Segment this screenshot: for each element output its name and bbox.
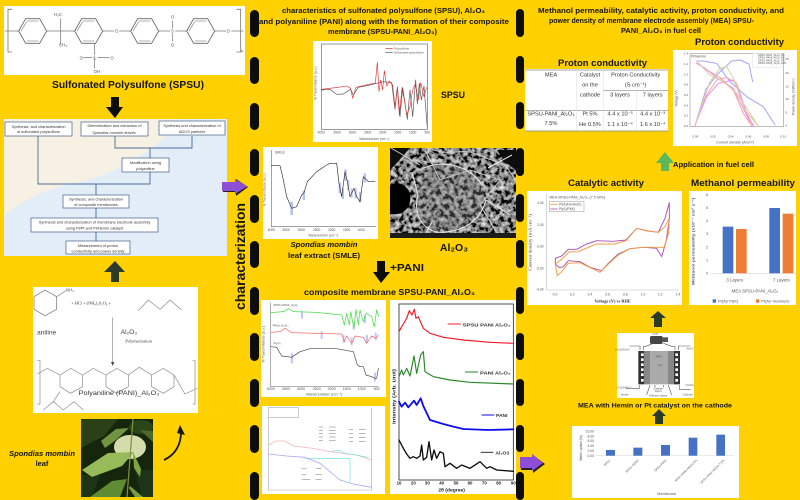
label: Application in fuel cell: Application in fuel cell: [673, 162, 754, 169]
panel: research flowchart: [4, 119, 227, 256]
photo: Spondias mombin leaf: [81, 419, 153, 497]
chart: polarization and power density: 10: [785, 97, 789, 101]
chart: XRD patterns: Intensity (Arb. Unit): [392, 369, 398, 424]
panel: SPSU chemical structure: O: [171, 43, 175, 48]
diagram: MEA fuel cell: [615, 332, 694, 398]
panel: PANI synthesis reaction: Al₂O₃: [121, 329, 137, 336]
chart: XRD patterns: 10: [397, 481, 402, 486]
panel: PANI synthesis reaction: NH₂: [66, 287, 74, 292]
heading: Proton conductivity table: Proton conductivity: [558, 58, 648, 69]
label: +PANI: +PANI: [390, 262, 424, 274]
heading: characteristics of materials: and polyaniline (PANI) along with the formation of their composite: [259, 17, 509, 26]
chart: polarization and power density: 25: [785, 57, 789, 61]
chart: polarization and power density: 1.0: [684, 72, 688, 76]
chart: cyclic voltammogram: -2,00: [536, 266, 544, 270]
chart: polarization and power density: 0.0: [684, 124, 688, 128]
table: proton conductivity: 1.6 x 10⁻⁴: [640, 121, 666, 128]
label: characterization: characterization: [232, 203, 248, 310]
table: proton conductivity: on the: [582, 82, 598, 88]
chart: water uptake bars: SPSU-PANI-Al2O3 7.5%: [699, 458, 726, 485]
chart: methanol permeability bars: Pt(A)/ Hemin(K): [761, 299, 790, 304]
chart: polarization and power density: Current density (A/cm²): [716, 141, 754, 145]
chart: methanol permeability bars: 0: [706, 272, 708, 276]
heading: characteristics of materials: membrane (SPSU-PANI_Al₂O₃): [328, 27, 437, 36]
heading: Methanol permeability: Methanol permeability: [691, 178, 796, 189]
arrow: curved up from leaf: [164, 425, 185, 460]
chart: XRD patterns: 80: [496, 481, 502, 486]
panel: research flowchart: using Pt/Pt and Pt/Hemin catalyst: [66, 226, 124, 230]
panel: SPSU chemical structure: O: [110, 55, 114, 60]
diagram: MEA fuel cell: Load: [652, 332, 658, 336]
label: MEA catalyst caption: MEA with Hemin or Pt catalyst on the cathode: [578, 402, 732, 410]
chart: polarization and power density: 0.00: [692, 134, 699, 138]
panel: SPSU chemical structure: O: [115, 29, 119, 34]
chart: polarization and power density: 0.10: [780, 134, 787, 138]
table: proton conductivity: 4.4 x 10⁻³: [640, 111, 665, 117]
chart: water uptake bars: Water uptake (%): [579, 435, 583, 461]
chart: polarization and power density: [673, 50, 797, 146]
label: SMLE: Spondias mombin: [290, 240, 358, 249]
chart: water uptake bars: 2.00: [588, 449, 594, 453]
chart: TGA thermogram: [262, 406, 385, 494]
chart: polarization and power density: 5: [785, 110, 787, 114]
panel: research flowchart: Spondias mombin leaves.: [92, 130, 137, 135]
panel: research flowchart: Synthesis and characterization of: [163, 123, 222, 128]
chart: polarization and power density: 0.04: [728, 134, 734, 138]
diagram: MEA fuel cell: CH₃OH/H₂O: [615, 347, 630, 351]
table: proton conductivity: 7.5%: [545, 121, 557, 127]
panel: SPSU chemical structure: O: [171, 14, 175, 19]
panel: SPSU chemical structure: S: [171, 29, 174, 34]
chart: composite FTIR spectra: Wavenumber (cm⁻¹): [306, 391, 343, 396]
arrow: up from PANI reaction: [104, 261, 125, 282]
label: SMLE: [288, 240, 361, 260]
heading: characteristics of materials: characteristics of sulfonated polysulfone (SPSU), Al₂O₃: [282, 6, 486, 15]
chart: SPSU FTIR spectrum: 1000: [409, 131, 417, 135]
chart: XRD patterns: [390, 300, 516, 494]
chart: cyclic voltammogram: 1.0: [641, 292, 645, 296]
chart: polarization and power density: 0.4: [684, 103, 688, 107]
heading: fuel cell performance: PANI_Al₂O₃ in fuel cell: [621, 26, 701, 35]
heading: Catalytic activity: Catalytic activity: [568, 178, 645, 189]
arrow: down to flowchart: [106, 97, 123, 118]
chart: water uptake bars: SPSU-PANI-Al2O3 5%: [674, 458, 698, 483]
chart: SPSU FTIR spectrum: 1500: [394, 131, 402, 135]
table: proton conductivity: (S cm⁻¹): [625, 82, 647, 88]
chart: cyclic voltammogram: Pt(A)/Hemin(K): [559, 202, 582, 206]
chart: composite FTIR spectra: PANI_Al₂O₃: [273, 324, 289, 328]
diagram: MEA fuel cell: Cathode: [683, 393, 693, 397]
chart: SPSU FTIR spectrum: [313, 41, 432, 142]
chart: polarization and power density: 0: [785, 124, 787, 128]
film strip dashes right column: [516, 9, 524, 500]
chart: SPSU FTIR spectrum: 2500: [364, 131, 372, 135]
panel: research flowchart: of composite membranes: [74, 202, 118, 207]
chart: composite FTIR spectra: 3000: [297, 387, 305, 391]
chart: SPSU FTIR spectrum: 3500: [333, 131, 341, 135]
panel: research flowchart: Synthesis, and characterization: [69, 196, 123, 202]
chart: cyclic voltammogram: 0.4: [588, 292, 592, 296]
panel: research flowchart: Synthesis and characterization of membrane electrode assembly: [39, 220, 150, 224]
chart: XRD patterns: Al₂O3: [495, 451, 509, 457]
chart: polarization and power density: 0.08: [763, 134, 769, 138]
chart: SMLE FTIR spectrum: Wavenumber (cm⁻¹): [308, 234, 338, 238]
chart: SPSU FTIR spectrum: 2000: [379, 131, 387, 135]
chart: XRD patterns: 90: [511, 481, 516, 486]
chart: composite FTIR spectra: 1000: [358, 387, 366, 391]
chart: XRD patterns: PANI: [496, 413, 508, 419]
heading: Proton conductivity right: Proton conductivity: [695, 37, 785, 48]
diagram: MEA fuel cell: Cat.: [658, 363, 663, 367]
table: proton conductivity: He 0.5%: [579, 122, 601, 128]
label: SMLE: leaf extract (SMLE): [288, 251, 361, 260]
chart: polarization and power density: Voltage (V): [675, 90, 679, 107]
chart: SMLE FTIR spectrum: 3000: [298, 228, 305, 232]
table: proton conductivity: SPSU-PANI_Al₂O₃: [527, 111, 575, 117]
diagram: MEA fuel cell: H₂O/O₂: [686, 383, 694, 387]
chart: SMLE FTIR spectrum: 4000: [268, 228, 275, 232]
table: proton conductivity: Catalyst: [580, 73, 601, 79]
chart: polarization and power density: 0.02: [710, 134, 716, 138]
heading: fuel cell performance: power density of membrane electrode assembly (MEA) SPSU-: [549, 16, 754, 25]
chart: water uptake bars: SPSU: [603, 459, 611, 467]
chart: composite FTIR spectra: Al₂O₃: [273, 341, 281, 345]
heading: composite membrane: composite membrane SPSU-PANI_Al₂O₃: [304, 288, 475, 297]
diagram: MEA fuel cell: PEM: [656, 354, 662, 358]
table: proton conductivity: Pt 5%: [582, 111, 598, 117]
chart: SPSU FTIR spectrum: 4000: [318, 131, 325, 135]
chart: SMLE FTIR spectrum: 1000: [357, 228, 365, 232]
chart: polarization and power density: 0.06: [745, 134, 752, 138]
chart: SMLE FTIR spectrum: [263, 147, 378, 239]
heading: fuel cell performance: Methanol permeability, catalytic activity, proton conductivity, and: [538, 6, 784, 15]
panel: SPSU chemical structure: H₃C: [54, 12, 62, 17]
chart: methanol permeability bars: 1: [706, 258, 708, 262]
panel: SPSU chemical structure: CH₃: [59, 43, 67, 48]
image: Al2O3 SEM micrograph: [390, 148, 516, 238]
chart: XRD patterns: 70: [482, 481, 487, 486]
chart: SPSU FTIR spectrum: 3000: [349, 131, 356, 135]
chart: water uptake bars: SPSU-Al2O3: [625, 458, 640, 474]
chart: polarization and power density: Pt/Hemin: [691, 54, 706, 58]
chart: water uptake bars: [572, 426, 739, 498]
chart: cyclic voltammogram: Voltage (V) vs RHE: [595, 299, 631, 304]
chart: methanol permeability bars: 5: [706, 206, 708, 210]
chart: methanol permeability bars: 7 Layers: [773, 278, 790, 283]
chart: water uptake bars: 0.00: [588, 454, 594, 458]
chart: composite FTIR spectra: 3500: [282, 387, 290, 391]
chart: SPSU FTIR spectrum: Polysulfone: [394, 47, 409, 51]
chart: cyclic voltammogram: 0.8: [623, 292, 628, 296]
chart: polarization and power density: SPSU-PANI_Al₂O₃ 10%: [758, 61, 787, 65]
chart: methanol permeability bars: 3: [706, 232, 708, 236]
panel: research flowchart: Al2O3 particles: [179, 129, 205, 134]
chart: methanol permeability bars: Pt(A)/ Pt(K): [718, 299, 739, 304]
chart: polarization and power density: SPSU-PANI_Al₂O₃ 7%: [758, 58, 785, 62]
panel: research flowchart: of sulfonated polysulfone: [17, 129, 60, 134]
chart: cyclic voltammogram: -4,00: [536, 288, 544, 292]
panel: SPSU chemical structure: S: [93, 55, 96, 60]
chart: cyclic voltammogram: MEA SPSU-PANI_Al₂O₃ (7.5 wt%): [549, 196, 605, 200]
chart: polarization and power density: SPSU-PANI_Al₂O₃ 5%: [758, 56, 785, 60]
chart: cyclic voltammogram: 0.6: [605, 292, 610, 296]
chart: water uptake bars: Membrane: [657, 491, 677, 496]
chart: SMLE FTIR spectrum: % Transmittance (a.u.): [263, 173, 267, 207]
heading: Sulfonated Polysulfone: Sulfonated Polysulfone (SPSU): [52, 79, 204, 91]
label: Spondias mombin leaf: Spondias mombin: [9, 449, 75, 458]
chart: XRD patterns: 40: [439, 481, 445, 486]
chart: polarization and power density: 0.2: [684, 114, 688, 118]
chart: cyclic voltammogram: 4,00: [537, 201, 544, 205]
label: SPSU: SPSU: [441, 90, 465, 101]
panel: PANI synthesis reaction: + HCl + (NH₄)₂S₂O₈ +: [71, 301, 111, 306]
chart: SPSU FTIR spectrum: Sulfonated polysulfone: [394, 51, 424, 55]
panel: SPSU chemical structure: n: [241, 49, 244, 54]
chart: methanol permeability bars: 4: [706, 219, 708, 223]
chart: SMLE FTIR spectrum: 2000: [328, 228, 336, 232]
arrow: up from water uptake: [652, 409, 666, 424]
table: proton conductivity: Proton Conductivity: [611, 73, 660, 79]
chart: cyclic voltammogram: 0,00: [537, 245, 544, 249]
chart: XRD patterns: 30: [425, 481, 430, 486]
panel: SPSU chemical structure: OH: [94, 69, 100, 74]
chart: composite FTIR spectra: 500: [374, 387, 380, 391]
chart: composite FTIR spectra: 1500: [343, 387, 351, 391]
chart: composite FTIR spectra: % Transmittance (a.u.): [262, 326, 266, 363]
chart: composite FTIR spectra: 2000: [328, 387, 336, 391]
chart: composite FTIR spectra: [261, 300, 386, 397]
table: proton conductivity: [525, 69, 668, 131]
chart: SPSU FTIR spectrum: 500: [425, 131, 430, 135]
chart: XRD patterns: SPSU PANI Al₂O₃: [463, 323, 511, 329]
chart: SPSU FTIR spectrum: % Transmittance (a.u.): [314, 67, 318, 100]
panel: research flowchart: Determination and extraction of: [87, 123, 142, 128]
panel: PANI synthesis reaction: Polyaniline (PANI)_Al₂O₃: [79, 390, 160, 397]
chart: SMLE FTIR spectrum: SMLE: [275, 150, 286, 154]
diagram: MEA fuel cell: Anode: [621, 393, 629, 397]
chart: methanol permeability bars: [689, 191, 797, 305]
chart: methanol permeability bars: MEA SPSU-PANI_Al₂O₃: [732, 288, 778, 293]
table: proton conductivity: 4.4 x 10⁻³: [607, 111, 633, 117]
table: proton conductivity: 7 layers: [643, 92, 663, 98]
chart: methanol permeability bars: 6: [706, 193, 708, 197]
panel: SPSU chemical structure: [4, 6, 245, 75]
chart: polarization and power density: 20: [785, 71, 789, 75]
chart: cyclic voltammogram: 0.0: [553, 292, 557, 296]
chart: SMLE FTIR spectrum: 1500: [343, 228, 351, 232]
panel: research flowchart: Synthesis, and characterization: [11, 124, 66, 129]
panel: research flowchart: conductivity and power density: [72, 248, 125, 254]
chart: methanol permeability bars: 3 Layers: [726, 278, 743, 283]
panel: PANI synthesis reaction: [33, 287, 198, 413]
chart: water uptake bars: 6.00: [588, 439, 594, 443]
table: proton conductivity: cathode: [580, 92, 600, 98]
chart: SPSU FTIR spectrum: Wavenumber (cm⁻¹): [359, 137, 389, 141]
chart: SMLE FTIR spectrum: 3500: [282, 228, 290, 232]
chart: polarization and power density: SPSU-PANI_Al₂O₃ 3%: [758, 53, 785, 57]
chart: XRD patterns: 2θ (degree): [438, 487, 465, 493]
panel: PANI synthesis reaction: Polymerization: [125, 338, 153, 343]
table: proton conductivity: MEA: [545, 73, 557, 79]
chart: composite FTIR spectra: SPSU-PANI_Al₂O₃: [273, 303, 299, 307]
chart: polarization and power density: 0.8: [684, 83, 688, 87]
arrow: down +PANI: [373, 261, 390, 283]
heading: characteristics of materials: [259, 6, 509, 36]
chart: polarization and power density: 0.6: [684, 93, 688, 97]
table: proton conductivity: 3 layers: [610, 92, 630, 98]
panel: research flowchart: Measurement of proton: [78, 243, 118, 248]
chart: methanol permeability bars: 2: [706, 245, 708, 249]
arrow: purple to MEA results: [520, 454, 545, 473]
chart: cyclic voltammogram: 2,00: [537, 223, 544, 227]
chart: XRD patterns: 50: [454, 481, 459, 486]
panel: SPSU chemical structure: O: [80, 55, 84, 60]
chart: cyclic voltammogram: 0.2: [570, 292, 575, 296]
chart: composite FTIR spectra: 2500: [313, 387, 321, 391]
chart: methanol permeability bars: Methanol permeability (x10⁻⁷ cm² s⁻¹): [691, 197, 696, 285]
chart: cyclic voltammogram: Pt(A)/Pt(K): [559, 207, 575, 211]
chart: polarization and power density: 15: [785, 84, 789, 88]
arrow: up from MEA: [650, 311, 666, 327]
text: leaf: [36, 459, 49, 468]
panel: SPSU chemical structure: O: [227, 29, 231, 34]
chart: cyclic voltammogram: 1.4: [676, 292, 680, 296]
chart: polarization and power density: Power density (mW/cm²): [792, 79, 796, 115]
heading: fuel cell performance: [538, 6, 784, 35]
chart: polarization and power density: 1.4: [684, 52, 688, 56]
diagram: MEA fuel cell: layers: [655, 389, 663, 393]
chart: water uptake bars: SPSU-PANI: [653, 458, 667, 473]
diagram: MEA fuel cell: Catalyst: [654, 386, 663, 390]
table: proton conductivity: 1.1 x 10⁻⁴: [607, 121, 633, 128]
arrow: green up: [656, 152, 674, 171]
chart: cyclic voltammogram: 1.2: [658, 292, 663, 296]
chart: water uptake bars: 10.00: [586, 429, 594, 433]
chart: XRD patterns: 20: [411, 481, 416, 486]
panel: research flowchart: polyaniline: [136, 166, 155, 171]
panel: PANI synthesis reaction: aniline: [37, 330, 57, 337]
chart: polarization and power density: 1.2: [684, 62, 688, 66]
chart: cyclic voltammogram: Current density (mA cm⁻²): [528, 213, 533, 271]
chart: XRD patterns: 60: [468, 481, 473, 486]
diagram: MEA fuel cell: Diffusion layers: [649, 393, 668, 397]
chart: composite FTIR spectra: 4000: [267, 387, 275, 391]
chart: water uptake bars: 4.00: [588, 444, 594, 448]
arrow: purple to characterization: [222, 179, 248, 196]
chart: XRD patterns: PANI Al₂O₃: [480, 370, 511, 376]
chart: cyclic voltammogram: [527, 191, 682, 305]
chart: water uptake bars: 8.00: [588, 434, 594, 438]
film strip dashes left column: [250, 10, 259, 500]
diagram: MEA fuel cell: Air/O₂: [686, 346, 694, 350]
label: Al2O3: Al₂O₃: [440, 242, 468, 254]
panel: research flowchart: Modification using: [130, 160, 161, 165]
chart: SMLE FTIR spectrum: 2500: [313, 228, 321, 232]
diagram: MEA fuel cell: CH₃OH/H₂O: [617, 385, 631, 389]
